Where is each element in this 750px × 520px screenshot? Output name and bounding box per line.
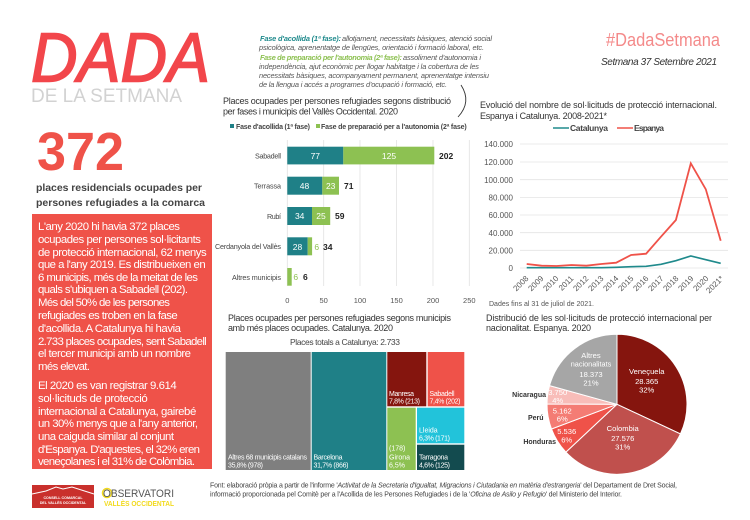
logo: Observatori: VALLÈS OCCIDENTAL xyxy=(104,499,174,508)
treemap: places by municipality: Tarragona xyxy=(419,454,448,462)
panel: summary text: quals s'ubiquen a Sabadell (202). xyxy=(38,284,188,296)
panel: summary text: ocupades per persones sol·licitants xyxy=(38,234,201,246)
line chart: applications: 2008 xyxy=(511,274,531,293)
bar chart: phases by municipality: 28 xyxy=(293,242,302,252)
bar chart: phases by municipality xyxy=(215,124,476,305)
bar chart: phases by municipality: Altres municipis xyxy=(232,273,281,282)
heading: line chart: Evolució del nombre de sol·licituds de protecció internacional. xyxy=(480,100,717,110)
text block: phase definitions: Fase de preparació per l'autonomia (2ª fase): xyxy=(260,53,403,62)
heading: line chart xyxy=(480,100,717,121)
source note: informació proporcionada pel Comitè per a l'Acollida de les Persones Refugiades i de la 'Oficina de Asilo y Refugio' del Ministerio del Interior. xyxy=(210,492,622,498)
treemap: places by municipality: 6,5% xyxy=(389,462,405,470)
hashtag and date xyxy=(601,30,721,68)
text block: phase definitions: independència, ajut econòmic per llogar habitatge i la cobertura de les xyxy=(259,62,479,71)
bar chart legend: Fase d'acollida (1ª fase) xyxy=(236,124,310,131)
heading: treemap: Places totals a Catalunya: 2.733 xyxy=(290,337,400,347)
pie chart: nationality: 27.576 xyxy=(611,434,634,443)
panel: summary text: Més del 50% de les persones xyxy=(38,297,170,309)
line chart: applications: 2021* xyxy=(704,274,725,295)
panel: summary text: internacional a Catalunya, gairebé xyxy=(38,406,196,418)
text block: phase definitions: allotjament, necessitats bàsiques, atenció social xyxy=(342,34,492,43)
line chart legend xyxy=(553,123,664,133)
line chart: applications: 2014 xyxy=(601,274,621,293)
text block: phase definitions: de la llengua i accés a programes d'ocupació i formació, etc. xyxy=(259,80,447,89)
pie chart: nationality: 5.536 xyxy=(557,427,576,436)
heading: bar chart xyxy=(223,96,451,116)
treemap: places by municipality xyxy=(226,352,464,470)
bar chart: phases by municipality: 0 xyxy=(285,296,289,305)
bar chart: phases by municipality: 23 xyxy=(326,181,336,191)
line chart: applications: 2016 xyxy=(631,274,651,293)
pie chart: nationality: Altres xyxy=(581,351,601,360)
bar chart legend: Fase de preparació per a l'autonomia (2ª fase) xyxy=(321,124,467,131)
pie chart: nationality: 31% xyxy=(615,443,631,452)
logo: Observatori: OBSERVATORI xyxy=(103,488,174,500)
key figure: 372: places residencials ocupades per xyxy=(36,182,202,194)
logo: Observatori xyxy=(102,488,174,508)
pie chart: nationality: 28.365 xyxy=(635,377,658,386)
text block: phase definitions: necessitats bàsiques, acompanyament permanent, aprenentatge intensiu xyxy=(259,71,489,80)
treemap: places by municipality: 31,7% (866) xyxy=(314,462,348,470)
panel: summary text: que a l'any 2019. Es distribueixen en xyxy=(38,259,206,271)
bar chart: phases by municipality: 48 xyxy=(300,181,309,191)
line chart: applications: 2012 xyxy=(571,274,591,293)
pie chart: nationality: Nicaragua xyxy=(512,392,546,399)
treemap: places by municipality: Lleida xyxy=(419,428,438,434)
treemap: places by municipality: Sabadell xyxy=(430,391,455,398)
bar chart: phases by municipality: 6 xyxy=(303,272,308,282)
line chart: applications: 2013 xyxy=(586,274,606,293)
line chart: applications: 100.000 xyxy=(484,176,514,185)
heading: treemap xyxy=(228,313,452,347)
bar chart: phases by municipality: Rubí xyxy=(267,212,281,221)
logo: Consell Comarcal: DEL VALLÈS OCCIDENTAL xyxy=(40,500,87,505)
title: DADA de la setmana: DE LA SETMANA xyxy=(31,86,182,107)
line chart: applications: 120.000 xyxy=(484,158,514,167)
text block: phase definitions: assoliment d'autonomia i xyxy=(403,53,481,62)
title: DADA de la setmana: DADA xyxy=(31,18,210,96)
panel: summary text: refugiades es troben en la fase xyxy=(38,310,178,322)
bar chart: phases by municipality: 100 xyxy=(354,296,366,305)
logo: Consell Comarcal: CONSELL COMARCAL xyxy=(43,496,83,500)
panel: summary text: d'Espanya. D'aquestes, el 32% eren xyxy=(38,444,200,456)
text block: phase definitions: psicològica, aprenentatge de llengües, orientació i formació laboral, etc. xyxy=(258,43,484,52)
heading: pie chart xyxy=(486,313,712,333)
treemap: places by municipality: 4,6% (125) xyxy=(419,462,450,470)
panel: summary text: una caiguda similar al conjunt xyxy=(38,431,175,443)
line chart: applications: 2017 xyxy=(646,274,666,293)
heading: line chart: Espanya i Catalunya. 2008-2021* xyxy=(480,111,607,121)
line chart: applications: 140.000 xyxy=(484,140,514,149)
line chart: applications: 2019 xyxy=(676,274,696,293)
panel: summary text: veneçolanes i el 31% de Colòmbia. xyxy=(38,456,195,468)
heading: bar chart: Places ocupades per persones refugiades segons distribució xyxy=(223,96,451,106)
logo: Consell Comarcal xyxy=(32,485,94,508)
bar chart: phases by municipality: 25 xyxy=(316,211,326,221)
line chart legend: Espanya xyxy=(634,123,664,133)
bar chart: phases by municipality: 202 xyxy=(439,151,453,161)
panel: summary text: 2.733 places ocupades, sent Sabadell xyxy=(38,336,207,348)
panel: summary text: 6 municipis, més de la meitat de les xyxy=(38,272,198,284)
line chart: applications: 2015 xyxy=(616,274,636,293)
bar chart legend xyxy=(230,124,467,131)
heading: bar chart: per fases i municipis del Vallès Occidental. 2020 xyxy=(223,106,398,116)
pie chart: nationality: 5.162 xyxy=(553,406,572,415)
text block: phase definitions xyxy=(258,34,492,89)
source note xyxy=(210,482,677,498)
panel: summary text: més elevat. xyxy=(38,361,90,373)
line chart legend: Catalunya xyxy=(570,123,608,133)
treemap: places by municipality: Manresa xyxy=(389,391,414,398)
heading: pie chart: nacionalitat. Espanya. 2020 xyxy=(486,323,591,333)
bar chart: phases by municipality: Cerdanyola del Vallès xyxy=(215,242,281,251)
pie chart: nationality: 3.750 xyxy=(548,388,567,397)
panel: summary text: un 30% menys que a l'any anterior, xyxy=(38,418,198,430)
line chart: applications: 2009 xyxy=(526,274,546,293)
pie chart: nationality: 21% xyxy=(583,379,599,388)
line chart: applications: 20.000 xyxy=(489,246,514,256)
line chart: applications: 2011 xyxy=(557,274,576,293)
key figure: 372: persones refugiades a la comarca xyxy=(36,197,205,209)
key figure: 372: 372 xyxy=(37,122,124,182)
line chart: applications: 0 xyxy=(509,264,514,273)
pie chart: nationality: Colombia xyxy=(607,424,640,433)
line chart: applications: 80.000 xyxy=(489,194,514,202)
pie chart: nationality: 6% xyxy=(557,415,568,424)
source note: Font: elaboració pròpia a partir de l'informe 'Activitat de la Secretaria d'Igualtat, Migracions i Ciutadania en matèria d'estrangeria' del Departament de Dret Social, xyxy=(210,482,677,490)
panel: summary text: d'acollida. A Catalunya hi havia xyxy=(38,323,182,335)
treemap: places by municipality: (178) xyxy=(389,446,405,452)
pie chart: nationality: Perú xyxy=(528,415,544,422)
bracket arrow xyxy=(458,85,466,117)
treemap: places by municipality: 7,4% (202) xyxy=(430,398,460,406)
treemap: places by municipality: 6,3% (171) xyxy=(419,436,450,442)
pie chart: nationality: 4% xyxy=(552,396,563,405)
heading: treemap: amb més places ocupades. Catalunya. 2020 xyxy=(228,323,393,333)
pie chart: nationality: Honduras xyxy=(523,439,556,446)
pie chart: nationality: 32% xyxy=(639,386,655,395)
bar chart: phases by municipality: 50 xyxy=(320,296,328,305)
panel: summary text xyxy=(32,214,212,469)
heading: treemap: Places ocupades per persones refugiades segons municipis xyxy=(228,313,452,323)
panel: summary text: L'any 2020 hi havia 372 places xyxy=(38,221,180,233)
line chart: applications xyxy=(484,123,728,295)
treemap: places by municipality: Girona xyxy=(389,454,410,462)
line chart: applications: 60.000 xyxy=(489,211,514,220)
treemap: places by municipality: 7,8% (213) xyxy=(389,398,420,406)
pie chart: nationality xyxy=(512,334,687,474)
bar chart: phases by municipality: 71 xyxy=(344,181,354,191)
bar chart: phases by municipality: 34 xyxy=(323,242,333,252)
pie chart: nationality: nacionalitats xyxy=(571,360,612,369)
hashtag and date: #DadaSetmana xyxy=(606,30,721,50)
bar chart: phases by municipality: 59 xyxy=(335,211,345,221)
bar chart: phases by municipality: Sabadell xyxy=(255,152,281,160)
hashtag and date: Setmana 37 Setembre 2021 xyxy=(601,57,717,68)
treemap: places by municipality: Altres 68 municipis catalans xyxy=(228,454,308,462)
panel: summary text: sol·licituds de protecció xyxy=(38,393,148,405)
panel: summary text: el tercer municipi amb un nombre xyxy=(38,348,191,360)
line chart: applications: 40.000 xyxy=(489,229,514,238)
pie chart: nationality: 6% xyxy=(561,436,572,445)
pie chart: nationality: Veneçuela xyxy=(629,367,665,376)
pie chart: nationality: 18.373 xyxy=(579,370,603,379)
panel: summary text: de protecció internacional, 62 menys xyxy=(38,247,207,259)
line chart: applications: 2018 xyxy=(661,274,681,293)
treemap: places by municipality: Barcelona xyxy=(314,454,343,462)
bar chart: phases by municipality: 150 xyxy=(390,296,403,305)
bar chart: phases by municipality: 77 xyxy=(311,151,320,161)
bar chart: phases by municipality: 6 xyxy=(293,272,298,282)
bar chart: phases by municipality: Terrassa xyxy=(254,182,281,190)
line chart: applications: 2020 xyxy=(691,274,711,293)
bar chart: phases by municipality: 6 xyxy=(314,242,319,252)
bar chart: phases by municipality: 125 xyxy=(382,151,396,161)
bar chart: phases by municipality: 250 xyxy=(463,296,476,305)
bar chart: phases by municipality: 200 xyxy=(427,296,439,305)
treemap: places by municipality: 35,8% (978) xyxy=(228,462,263,470)
panel: summary text: El 2020 es van registrar 9.614 xyxy=(38,380,177,392)
key figure: 372 xyxy=(36,122,205,209)
heading: pie chart: Distribució de les sol·licituds de protecció internacional per xyxy=(486,313,712,323)
line chart: applications: 2010 xyxy=(541,274,561,293)
bar chart: phases by municipality: 34 xyxy=(295,211,305,221)
text block: phase definitions: Fase d'acollida (1ª fase): xyxy=(260,34,342,43)
note: data date: Dades fins al 31 de juliol de 2021. xyxy=(489,301,594,308)
